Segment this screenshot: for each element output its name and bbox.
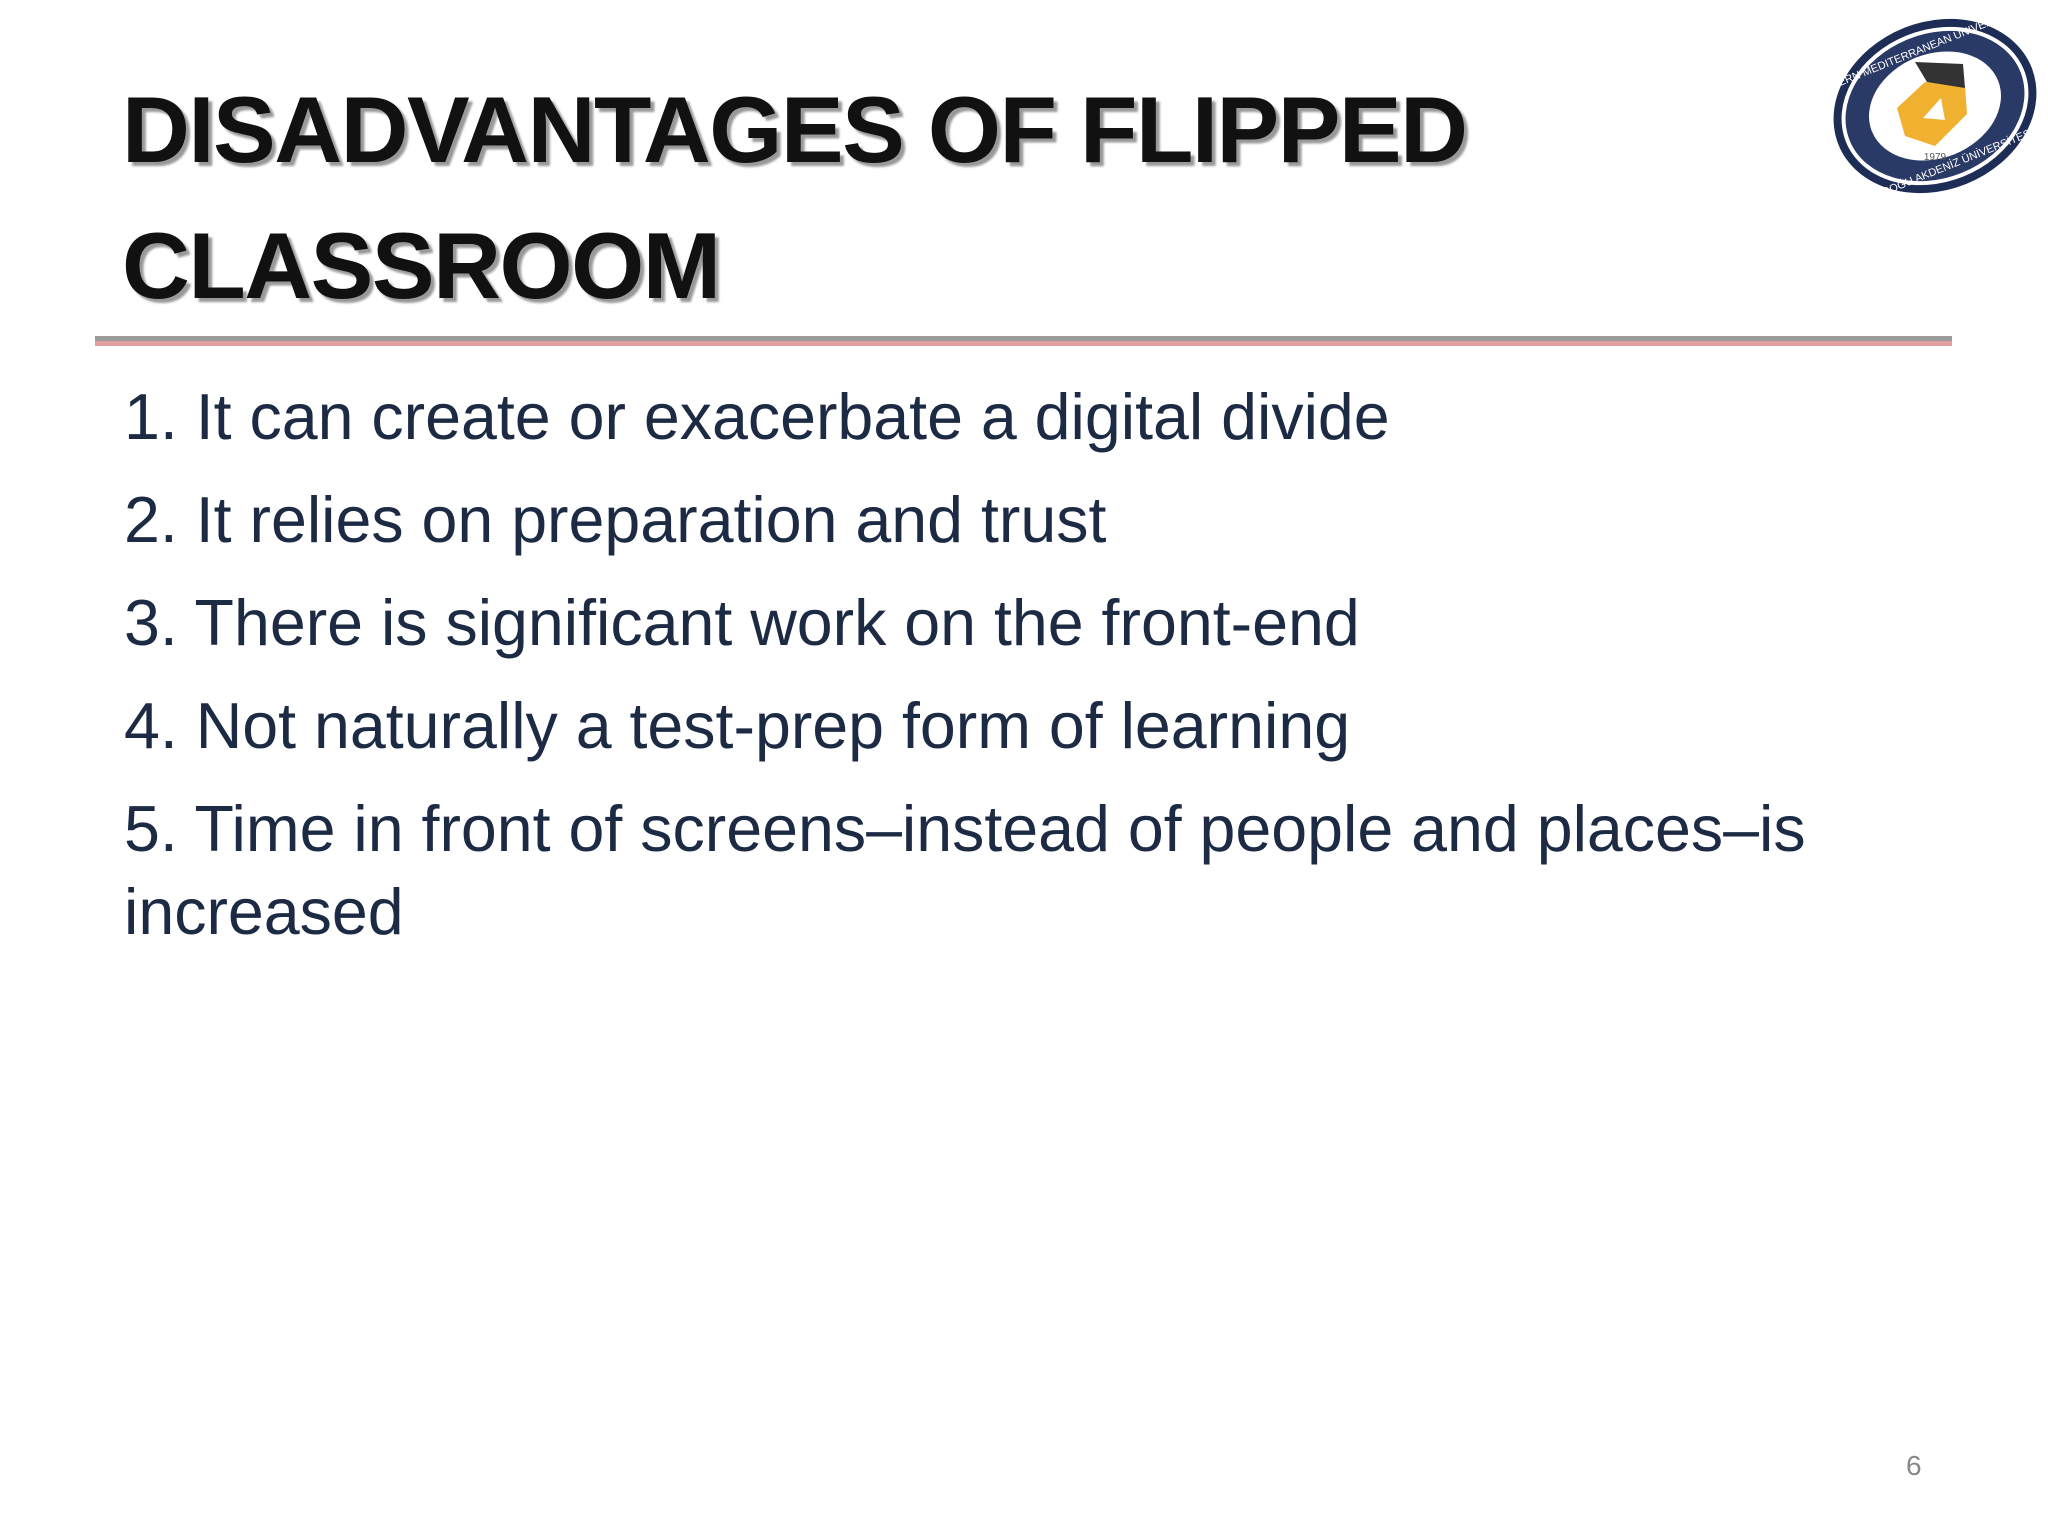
title (122, 77, 1470, 318)
title: CLASSROOM (122, 213, 720, 318)
divider (95, 336, 1952, 346)
list item 2: 2. It relies on preparation and trust (124, 484, 1106, 556)
logo: DOĞU AKDENİZ ÜNİVERSİTESİ (1880, 126, 2035, 199)
logo: 1979 (1924, 152, 1947, 163)
logo (1815, 14, 2036, 199)
list item 5 (124, 793, 1806, 948)
list item 4: 4. Not naturally a test-prep form of learning (124, 690, 1350, 762)
list item 3: 3. There is significant work on the front-end (124, 587, 1360, 659)
title: DISADVANTAGES OF FLIPPED (122, 77, 1466, 182)
list item 5: 5. Time in front of screens–instead of people and places–is (124, 793, 1806, 865)
list item 1: 1. It can create or exacerbate a digital divide (124, 381, 1390, 453)
list item 5: increased (124, 876, 404, 948)
page number: 6 (1906, 1450, 1922, 1481)
